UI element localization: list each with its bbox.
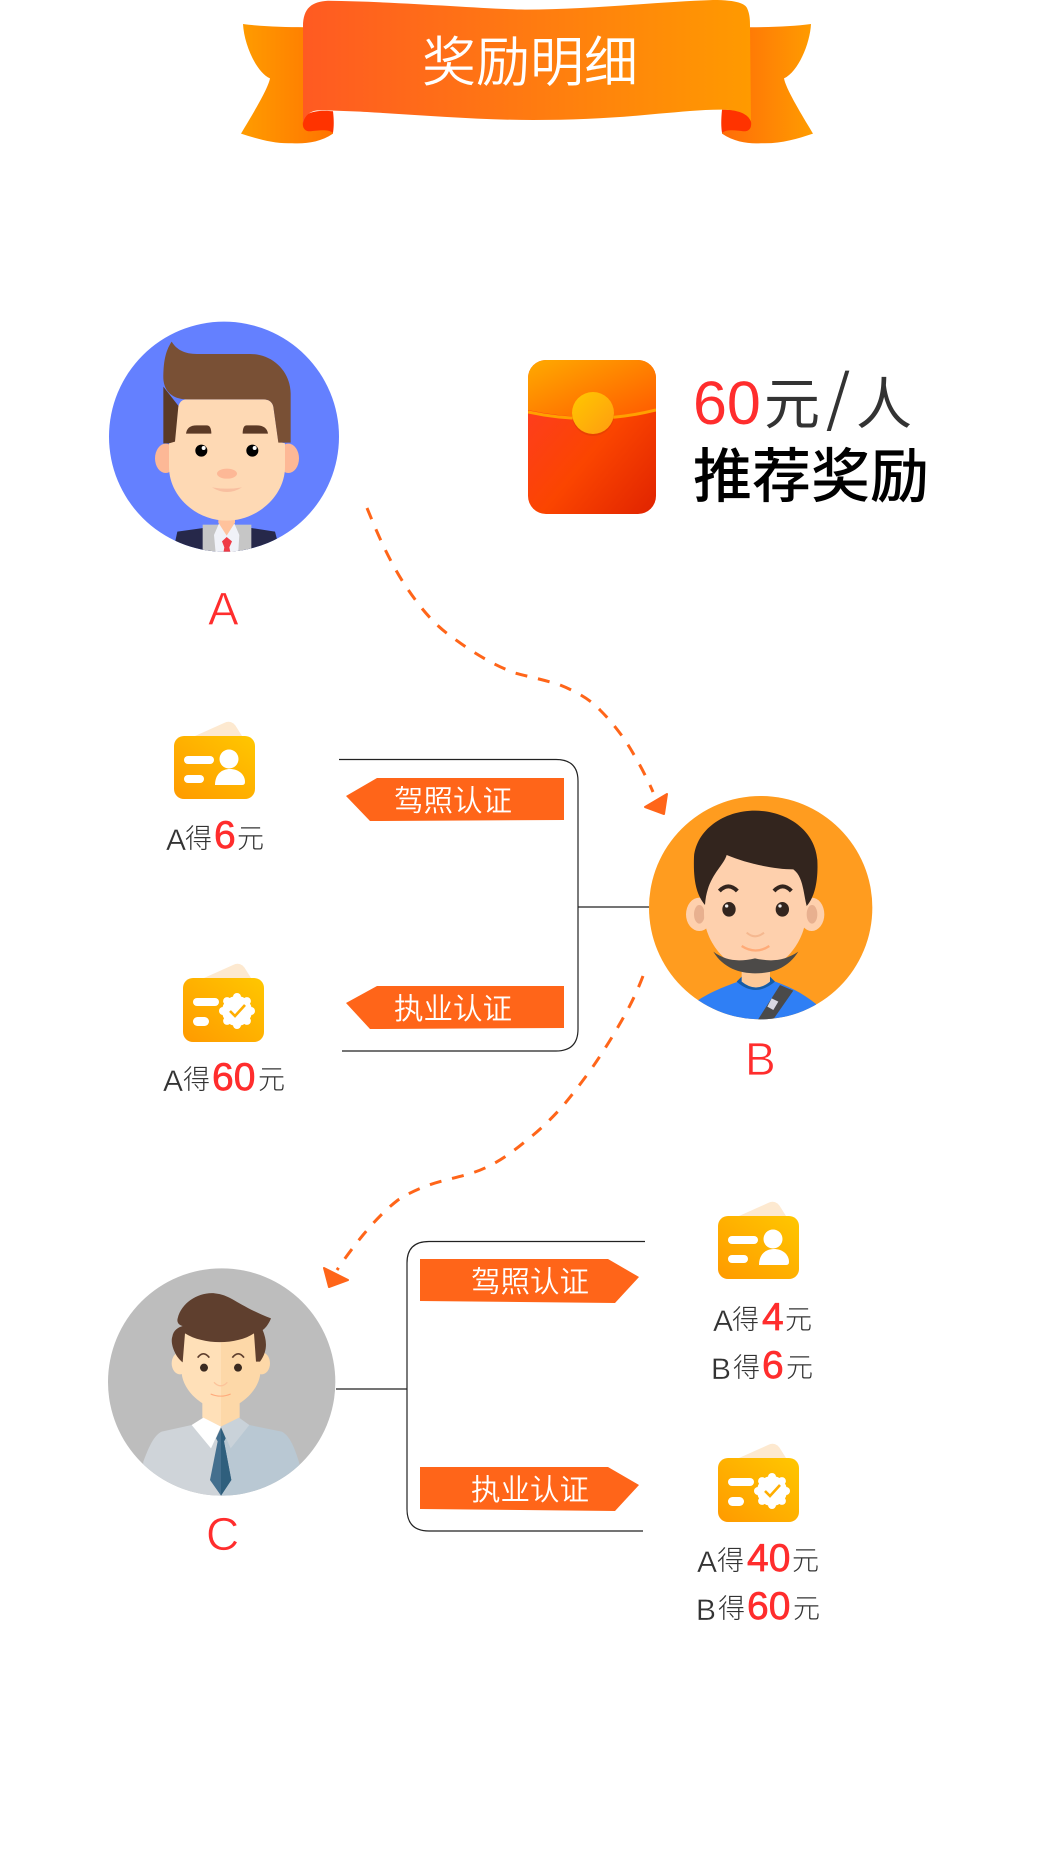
reward text: A gets 40, B gets 60: 60 xyxy=(747,1585,790,1628)
label C: C xyxy=(206,1508,239,1560)
tag: practice certificate right: 执业认证 xyxy=(471,1467,589,1509)
tag: driver licence right xyxy=(420,1259,639,1303)
tag: driver licence right: 驾照认证 xyxy=(471,1259,589,1301)
card icon: driver licence, C row xyxy=(718,1202,799,1279)
reward text: A gets 6 xyxy=(166,814,264,857)
reward heading: 推荐奖励 xyxy=(693,444,929,510)
reward text: A gets 40, B gets 60: 40 xyxy=(747,1537,790,1580)
dashed arrow A to B xyxy=(367,508,667,814)
avatar A xyxy=(109,322,339,557)
reward amount text xyxy=(693,348,912,438)
reward text: A gets 4, B gets 6: 得 xyxy=(732,1298,759,1337)
tag: practice certificate left xyxy=(346,986,564,1029)
reward text: A gets 40, B gets 60 xyxy=(696,1537,820,1628)
reward text: A gets 60: 60 xyxy=(212,1056,255,1099)
card icon: driver licence, A row xyxy=(174,722,255,799)
reward amount text: / xyxy=(826,348,850,438)
tag: driver licence left xyxy=(346,778,564,821)
reward text: A gets 40, B gets 60: 得 xyxy=(718,1587,745,1626)
reward text: A gets 4, B gets 6: 得 xyxy=(733,1346,760,1385)
reward text: A gets 4, B gets 6: 4 xyxy=(762,1296,784,1339)
reward text: A gets 60 xyxy=(163,1056,285,1099)
red packet icon xyxy=(528,360,656,514)
reward text: A gets 40, B gets 60: B xyxy=(696,1594,716,1627)
reward text: A gets 6: 得 xyxy=(185,817,212,856)
reward text: A gets 40, B gets 60: 得 xyxy=(717,1539,744,1578)
label B: B xyxy=(745,1033,776,1085)
tag: driver licence left: 驾照认证 xyxy=(394,778,512,820)
dashed arrow B to C xyxy=(324,976,643,1287)
title text: 奖励明细 xyxy=(422,18,638,97)
reward text: A gets 6: A xyxy=(166,824,186,857)
title ribbon banner xyxy=(241,0,813,143)
avatar B xyxy=(649,796,872,1023)
reward text: A gets 60: 得 xyxy=(183,1058,210,1097)
reward amount text: 人 xyxy=(856,373,912,436)
reward text: A gets 40, B gets 60: 元 xyxy=(793,1587,820,1626)
bracket connecting C to certifications xyxy=(336,1242,645,1531)
label A: A xyxy=(208,583,239,635)
reward text: A gets 4, B gets 6: A xyxy=(713,1305,733,1338)
tag: practice certificate right xyxy=(420,1467,639,1511)
reward text: A gets 6: 6 xyxy=(214,814,236,857)
infographic canvas xyxy=(108,0,926,1620)
reward text: A gets 60: 元 xyxy=(258,1058,285,1097)
reward text: A gets 4, B gets 6 xyxy=(711,1296,813,1387)
reward amount text: 60 xyxy=(693,369,761,437)
card icon: practice certificate, C row xyxy=(718,1444,799,1522)
reward text: A gets 40, B gets 60: A xyxy=(697,1546,717,1579)
bracket connecting B to certifications xyxy=(339,760,649,1051)
reward text: A gets 4, B gets 6: 6 xyxy=(762,1344,784,1387)
reward text: A gets 60: A xyxy=(163,1065,183,1098)
reward text: A gets 40, B gets 60: 元 xyxy=(792,1539,819,1578)
reward text: A gets 4, B gets 6: B xyxy=(711,1353,731,1386)
reward amount text: 元 xyxy=(764,373,820,436)
reward text: A gets 4, B gets 6: 元 xyxy=(786,1346,813,1385)
avatar C xyxy=(108,1268,335,1503)
reward text: A gets 4, B gets 6: 元 xyxy=(785,1298,812,1337)
card icon: practice certificate, A row xyxy=(183,964,264,1042)
tag: practice certificate left: 执业认证 xyxy=(394,986,512,1028)
reward text: A gets 6: 元 xyxy=(237,817,264,856)
